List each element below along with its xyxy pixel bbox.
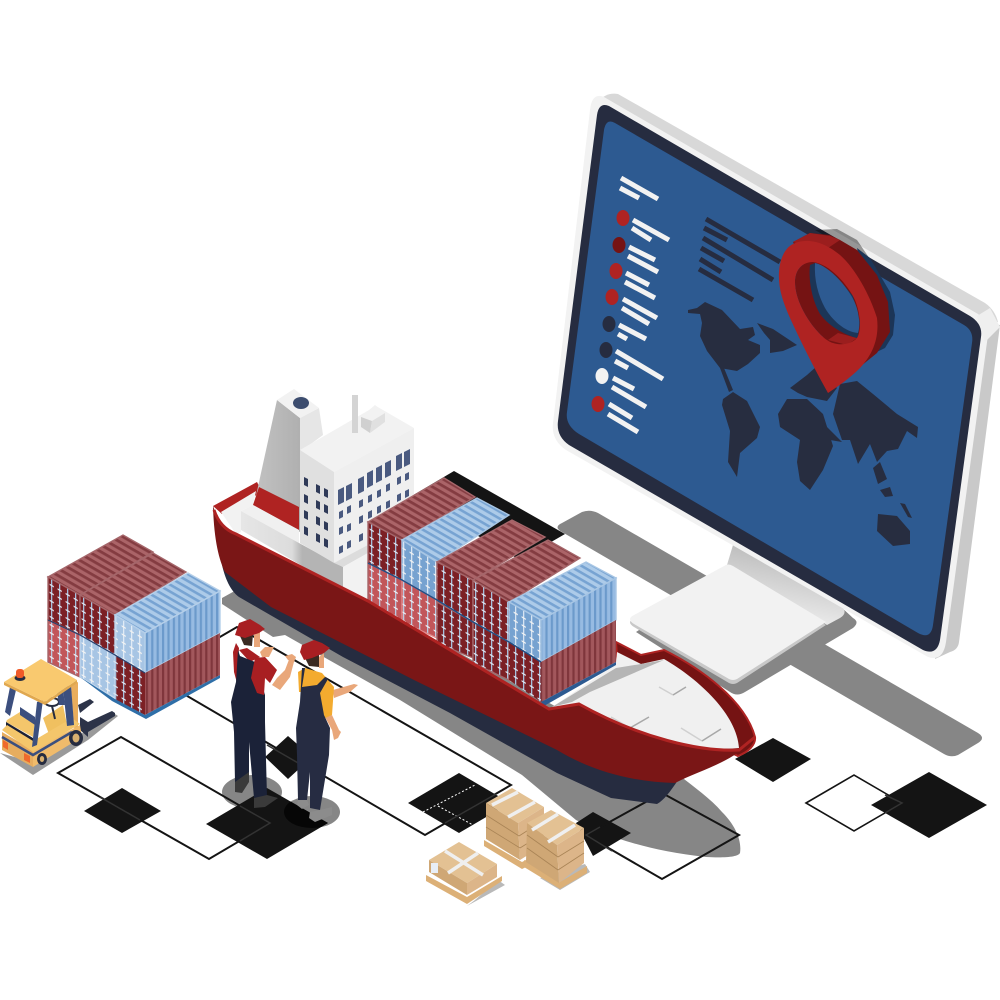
floor tile outline right — [806, 775, 902, 831]
forklift — [0, 659, 118, 775]
funnel — [253, 389, 323, 532]
front stack pallet — [524, 860, 587, 889]
ground shadow: worker two — [284, 796, 340, 828]
screen: list text bars — [608, 220, 669, 432]
forklift seat — [6, 712, 35, 737]
monitor stand neck — [727, 545, 845, 625]
ground shadow: worker one — [222, 775, 282, 809]
floor tile outline under bow — [586, 793, 739, 879]
worker one collar — [239, 648, 260, 662]
container joints left — [48, 620, 145, 673]
single pallet — [426, 875, 502, 904]
pin shadow on monitor edge — [815, 229, 872, 262]
mast box — [361, 405, 385, 433]
bow gray ramp — [552, 660, 664, 707]
floor tile: small black diamond — [84, 788, 161, 833]
deck hatch marks — [611, 687, 702, 741]
worker two dark shadow on tile — [284, 802, 328, 828]
forklift beacon — [14, 669, 26, 681]
container B lower light blue — [80, 635, 115, 698]
floor tile outline: long rectangle — [153, 627, 511, 835]
screen: world map — [688, 302, 918, 546]
floor tile: big black diamond right — [871, 772, 987, 838]
forklift steering wheel — [45, 698, 59, 719]
container: red fourth — [473, 540, 580, 680]
front stack pallet shadow — [540, 864, 590, 890]
monitor front rim — [553, 96, 988, 658]
deck hatch marks shaded — [630, 687, 721, 741]
bridge windows large — [338, 449, 410, 505]
container: red third — [437, 520, 545, 658]
pallet of boxes: front stack — [524, 810, 590, 890]
back stack pallet — [484, 840, 545, 869]
stern deck — [221, 491, 256, 534]
container D lower red — [80, 633, 220, 719]
container: front lower red — [509, 620, 616, 706]
pin extrusion — [793, 233, 890, 393]
worker one shoes — [235, 772, 278, 808]
worker two head — [300, 640, 330, 668]
ground shadow: ship — [222, 588, 740, 857]
forklift wheels — [37, 730, 83, 765]
monitor right side — [935, 322, 1000, 659]
monitor — [553, 94, 1000, 684]
container: pink second lower — [402, 580, 437, 638]
ship hull side maroon — [213, 506, 755, 783]
floor tile: black diamond by bow — [735, 738, 811, 782]
screen: dark header bars — [699, 219, 780, 300]
mast — [352, 395, 358, 433]
monitor base — [630, 564, 826, 684]
left container stack — [48, 535, 220, 719]
forklift body side — [33, 725, 82, 767]
worker two overalls — [296, 668, 330, 810]
monitor screen — [567, 122, 972, 635]
container B — [80, 553, 186, 655]
forklift footwell — [6, 722, 33, 745]
forklift forks — [78, 699, 115, 737]
forklift top edge — [2, 718, 80, 752]
bow rim — [616, 642, 755, 756]
worker two — [296, 640, 358, 822]
pallet of boxes: single — [426, 842, 505, 906]
pallet of boxes: back stack — [484, 788, 545, 869]
stern block — [241, 505, 343, 590]
worker two shoes — [297, 800, 332, 822]
forklift roof — [4, 659, 77, 705]
forklift tail lights — [3, 740, 30, 763]
monitor bezel — [558, 105, 981, 652]
container joints — [368, 563, 541, 662]
ground shadow: monitor base — [636, 590, 856, 694]
worker one red strip — [233, 643, 239, 683]
floor tile: large black diamond at feet — [206, 788, 328, 859]
floor tile outline: left rectangle — [58, 737, 270, 859]
bridge windows left face — [304, 477, 328, 548]
screen: list bullets — [592, 210, 630, 412]
floor tile: black diamond behind ship — [410, 471, 565, 560]
worker two pointing arm — [333, 684, 358, 698]
single pallet shadow — [467, 880, 505, 906]
ship hull red gunwale stripe — [214, 510, 755, 750]
pin hole — [795, 262, 860, 345]
forklift interior right — [43, 705, 67, 737]
forklift rear panel — [71, 682, 78, 728]
ship container stack — [368, 478, 616, 706]
forklift shadow — [0, 714, 118, 775]
worker one pointing arm — [272, 657, 295, 690]
worker one — [231, 619, 296, 808]
ground shadow: monitor stand band — [558, 511, 982, 756]
container: rear red — [368, 478, 475, 622]
worker one head — [235, 619, 265, 647]
worker one overalls — [231, 650, 267, 798]
ship hull lower navy — [222, 565, 678, 804]
pin navy cast shadow — [857, 248, 895, 360]
worker two lower arm — [325, 715, 341, 740]
worker one sleeve — [251, 657, 277, 695]
floor tile: diamond behind workers — [265, 736, 312, 779]
monitor top edge — [598, 94, 998, 324]
floor tile: black diamond under bow — [576, 812, 631, 856]
bow deck — [552, 652, 739, 749]
pin front face — [779, 241, 877, 393]
bridge block — [300, 406, 414, 600]
container: blue second — [402, 498, 509, 600]
worker one far hand — [285, 654, 296, 662]
worker two shirt — [298, 668, 334, 718]
pin extrusion top — [793, 233, 840, 248]
stern rail — [213, 482, 262, 514]
floor tile: centre diamond with dotted lines — [408, 773, 510, 833]
forklift body front — [2, 732, 33, 767]
forklift posts — [5, 685, 74, 747]
container A — [48, 535, 153, 677]
cargo ship — [213, 389, 755, 804]
forklift stripes — [2, 732, 72, 755]
map pin — [779, 229, 895, 393]
monitor corner highlight — [977, 308, 1000, 342]
bridge windows small right face — [339, 472, 409, 554]
forklift seat back — [20, 707, 35, 725]
container: front blue — [509, 562, 616, 662]
screen: list heading bars — [620, 178, 658, 199]
container C blue — [115, 573, 220, 673]
worker one raised hand — [260, 647, 274, 657]
